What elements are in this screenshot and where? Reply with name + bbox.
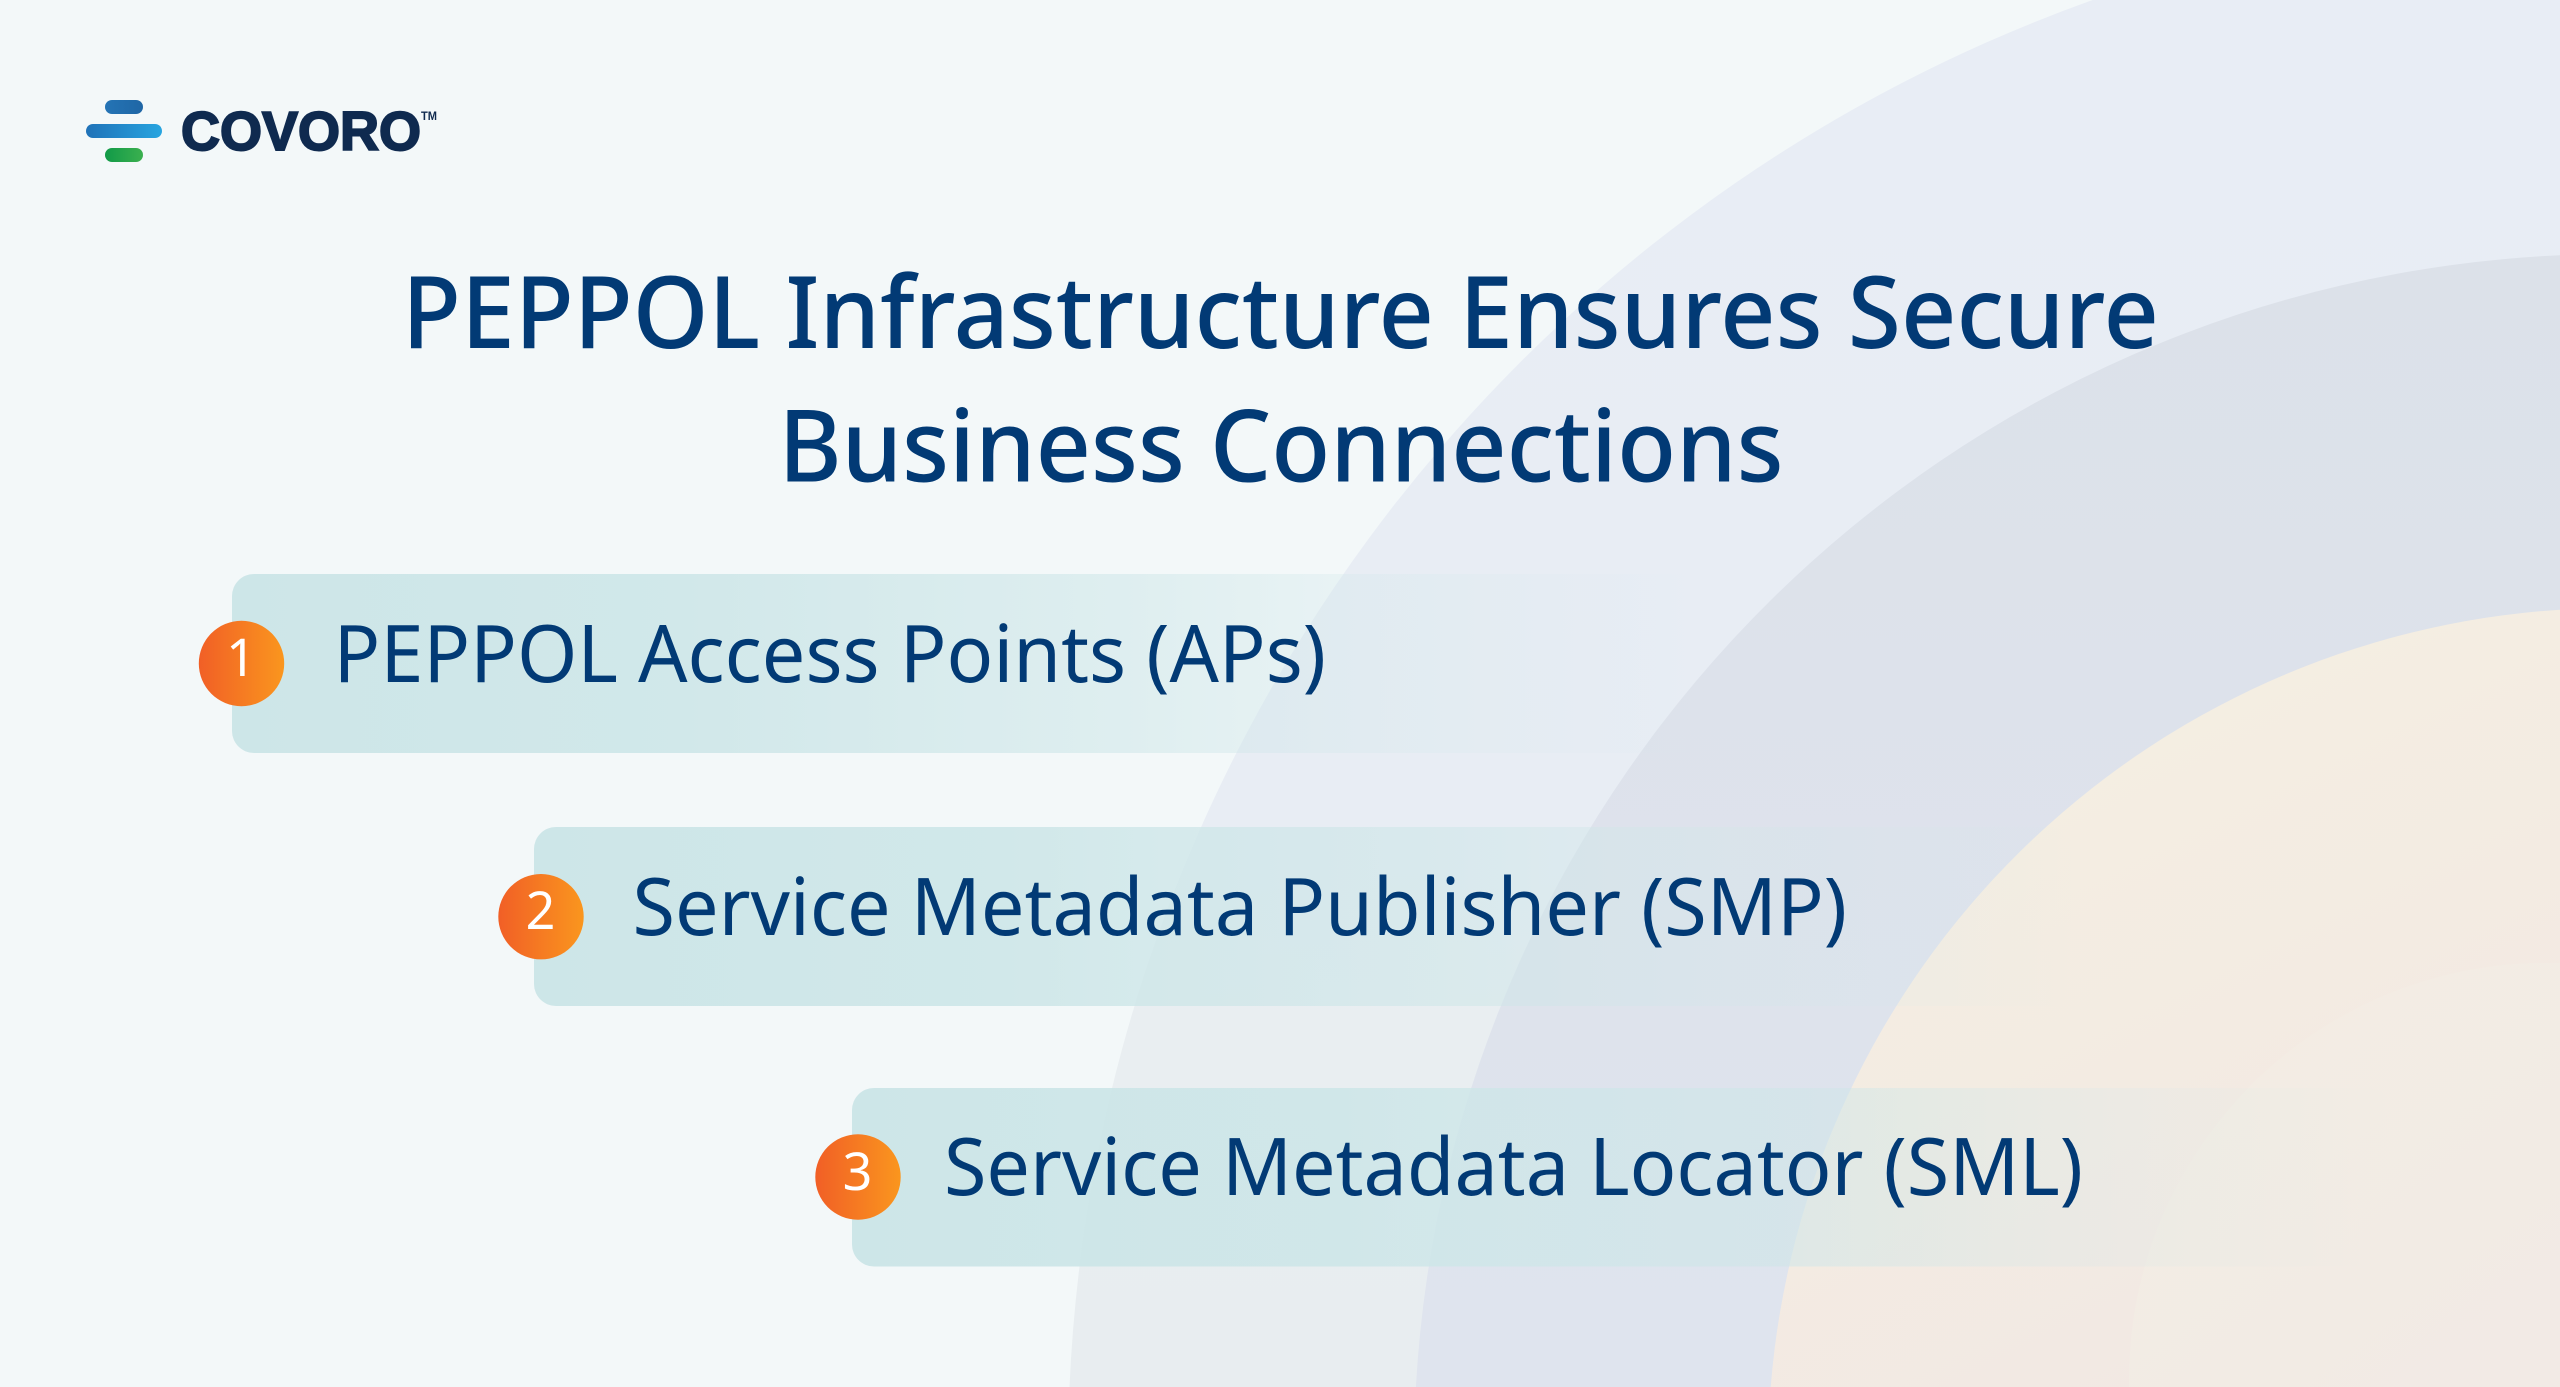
item 1 badge [199,621,284,706]
item 3 label: Service Metadata Locator (SML) [944,1110,2083,1219]
item 1: PEPPOL Access Points [199,574,1712,753]
item 2: Service Metadata Publisher [498,827,2074,1006]
title: PEPPOL Infrastructure Ensures Secure [402,242,2159,378]
title [402,242,2159,512]
item 3 badge [815,1134,901,1220]
item 2 bar [534,827,2074,1006]
decorative concentric arcs [1070,0,2560,1387]
item 2 badge: 2 [526,874,555,945]
logo [86,100,437,162]
item 1 bar [232,574,1712,753]
item 2 badge [498,874,584,959]
title: Business Connections [778,376,1784,512]
item 3: Service Metadata Locator [815,1088,2392,1266]
logo mark [86,100,162,162]
item 1 label: PEPPOL Access Points (APs) [334,597,1326,706]
item 3 bar [852,1088,2392,1266]
item 2 label: Service Metadata Publisher (SMP) [632,850,1847,959]
logo wordmark: COVORO [181,100,421,162]
trademark: TM [421,109,437,123]
item 1 badge: 1 [226,621,256,692]
item 3 badge: 3 [843,1135,872,1206]
